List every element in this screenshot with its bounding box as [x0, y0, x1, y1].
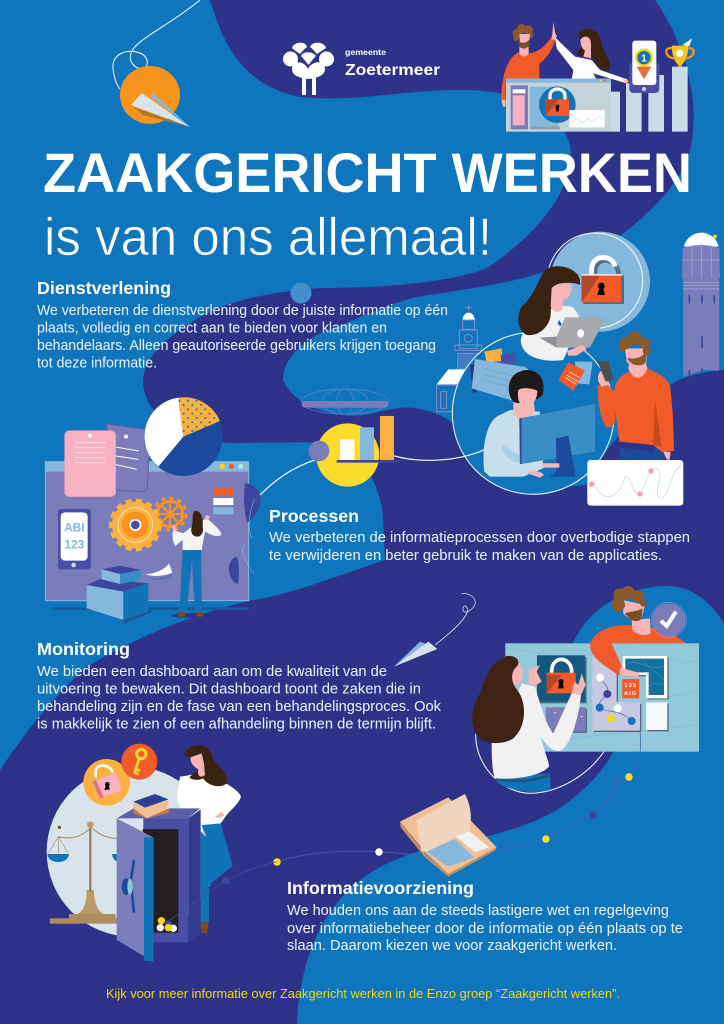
floating cards [558, 362, 593, 391]
network tile [592, 656, 641, 732]
phone with medal: 1 [641, 53, 647, 64]
leaves [229, 483, 261, 584]
scales [47, 821, 120, 924]
navy dot on connection line [170, 862, 277, 920]
man leaning over board [590, 586, 651, 677]
illustration: safe, scales, woman [47, 744, 277, 962]
logo: gemeente Zoetermeer: Zoetermeer [345, 62, 440, 79]
folder with papers [470, 348, 528, 401]
illustration: water tower [682, 233, 720, 377]
browser window with padlock [506, 79, 611, 132]
text block: Monitoring [37, 639, 442, 732]
illustration: bar chart on yellow circle with connecting line [260, 416, 484, 495]
title: ZAAKGERICHT WERKEN [43, 141, 692, 204]
books [133, 794, 169, 818]
board [505, 643, 699, 752]
trophy [666, 38, 694, 66]
text block: Dienstverlening: plaats, volledig en correct aan te bieden voor klanten en [37, 320, 387, 336]
text block: Dienstverlening: We verbeteren de dienstverlening door de juiste informatie op één [37, 303, 448, 319]
boxes [87, 566, 153, 624]
illustration: church [437, 305, 482, 412]
dotted connection line with dots [273, 730, 641, 866]
text block: Dienstverlening: Dienstverlening [37, 278, 171, 298]
background: left blue region [0, 0, 571, 770]
purple note [107, 424, 150, 492]
text block: Processen: te verwijderen en beter gebruik te maken van de applicaties. [269, 548, 662, 564]
padlock badge [83, 759, 130, 806]
logo: gemeente Zoetermeer [283, 43, 440, 95]
illustration: team high five with dashboard and trophy [501, 22, 694, 132]
illustration: open book [400, 794, 497, 877]
text block: Dienstverlening: behandelaars. Alleen geautoriseerde gebruikers krijgen toegang [37, 338, 436, 354]
text block: Dienstverlening: tot deze informatie. [37, 356, 157, 372]
text block: Informatievoorziening: Informatievoorziening [287, 878, 474, 898]
woman [177, 745, 241, 933]
light circle [47, 767, 217, 937]
woman at board [472, 656, 586, 792]
check badge [651, 602, 686, 638]
phone with ABI 123 [58, 509, 91, 569]
chart card [587, 460, 683, 506]
browser window [45, 462, 249, 601]
grid tile [646, 702, 669, 731]
illustration: paper plane with flight path [394, 593, 475, 667]
text block: Informatievoorziening: slaan. Daarom kiezen we voor zaakgericht werken. [287, 938, 617, 954]
pie chart [144, 397, 223, 476]
flags [213, 488, 233, 514]
text block: Informatievoorziening: over informatiebeheer door de informatie op één plaats op te [287, 921, 683, 937]
text block: Dienstverlening [37, 278, 448, 372]
logo: gemeente Zoetermeer: gemeente [345, 47, 386, 57]
big circle [452, 332, 614, 494]
text block: Monitoring: uitvoering te bewaken. Dit dashboard toont de zaken die in [37, 682, 421, 698]
background: bottom right blue region [297, 586, 724, 1024]
man with phone [598, 331, 674, 463]
woman with laptop [518, 266, 606, 361]
label 135 AIG: 135 [624, 683, 637, 689]
phone with ABI 123: 123 [64, 538, 85, 552]
label 135 AIG [622, 679, 639, 698]
text block: Monitoring: Monitoring [37, 639, 130, 659]
phone with ABI 123: ABI [64, 521, 85, 535]
phone with medal [629, 41, 659, 93]
subtitle: is van ons allemaal! [44, 208, 492, 267]
illustration: woman at dashboard with gears and pie chart [45, 397, 261, 624]
text block: Monitoring: We bieden een dashboard aan om de kwaliteit van de [37, 664, 387, 680]
text block: Processen: We verbeteren de informatieprocessen door overbodige stappen [269, 530, 690, 546]
label 135 AIG: AIG [624, 691, 637, 697]
icon: paper plane on orange circle with flight line [113, 0, 200, 127]
text block: Processen [269, 506, 690, 564]
safe [117, 808, 201, 962]
lock tile [537, 655, 587, 703]
key badge [121, 744, 157, 780]
map tile [623, 656, 669, 699]
text block: Informatievoorziening [287, 878, 683, 954]
white arc [476, 734, 604, 793]
small gear [154, 498, 186, 530]
text block: Processen: Processen [269, 506, 359, 526]
paper scrap [145, 563, 172, 580]
text block: Monitoring: is makkelijk te zien of een afhandeling binnen de termijn blijft. [37, 716, 436, 732]
big gear [111, 501, 159, 549]
decoration: translucent dot on band [290, 282, 312, 304]
man body behind board [593, 625, 687, 643]
text block: Monitoring: behandeling zijn en de fase van een behandelingsproces. Ook [37, 699, 442, 715]
pink note [65, 431, 116, 497]
footer note: Kijk voor meer informatie over Zaakgericht werken in de Enzo groep “Zaakgericht werken”. [106, 987, 620, 1001]
man high five [501, 22, 557, 107]
woman from behind [171, 511, 222, 618]
woman high five [553, 29, 629, 84]
man at monitor [483, 370, 595, 478]
illustration: colleagues at board [472, 586, 699, 793]
illustration: lock circle, colleagues around big circle [452, 232, 683, 506]
purple tile [546, 707, 587, 733]
illustration: stadium [302, 389, 388, 414]
background: top right blue region [283, 0, 724, 490]
text block: Informatievoorziening: We houden ons aan de steeds lastigere wet en regelgeving [287, 903, 669, 919]
lock circle [547, 232, 650, 332]
